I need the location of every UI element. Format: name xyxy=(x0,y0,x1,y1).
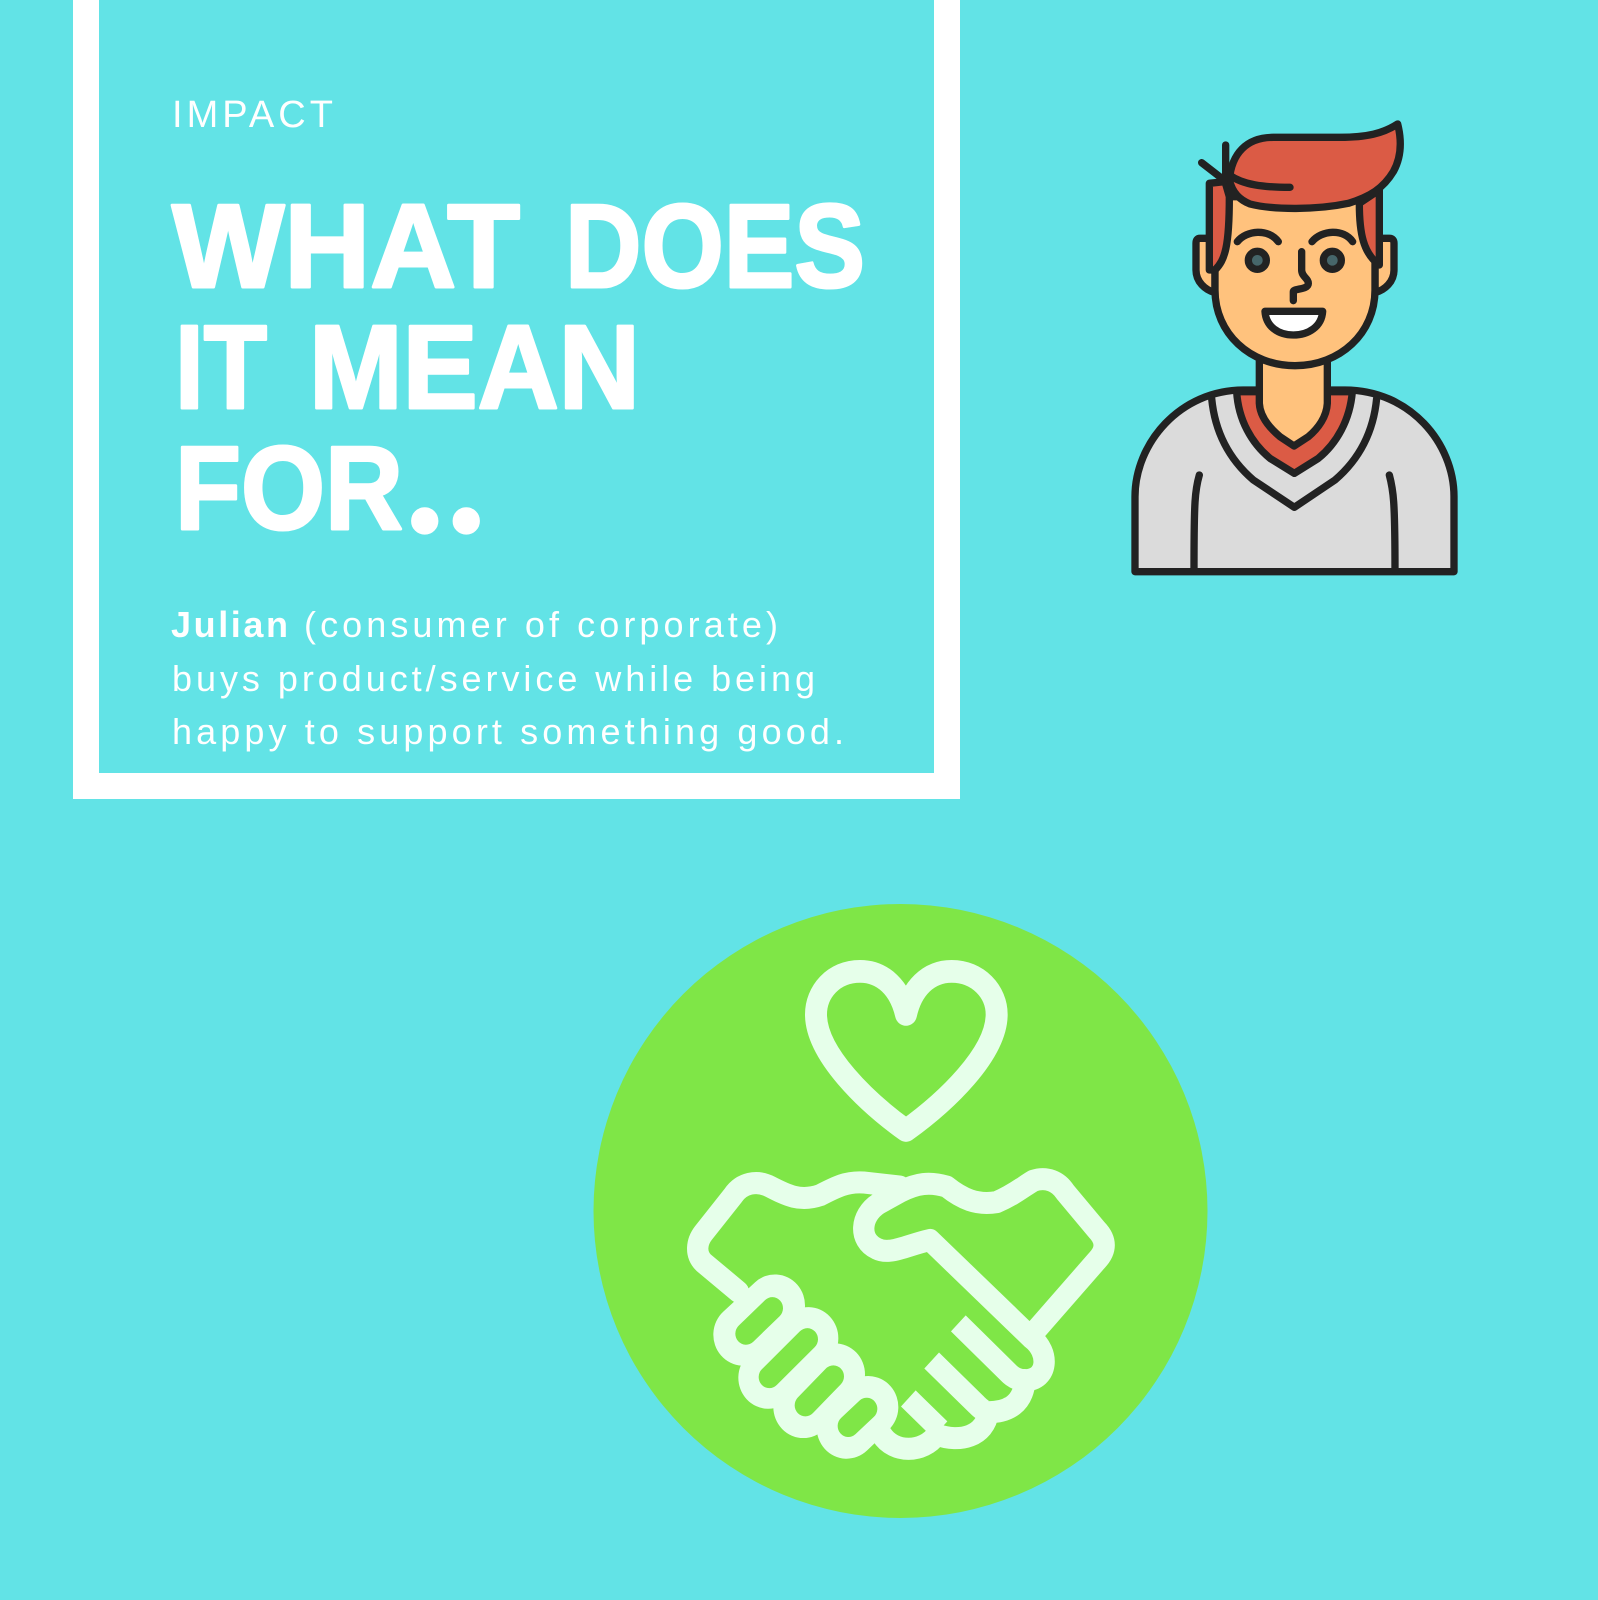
heading: what does it mean for: MEAN xyxy=(309,301,640,434)
eyebrow label: IMPACT: IMPACT xyxy=(172,94,333,136)
icon: smiling man with red hair xyxy=(1135,124,1454,572)
body text: Julian description: (consumer of corporate) xyxy=(304,604,778,645)
body text: Julian description xyxy=(171,604,844,752)
heading: what does it mean for: IT xyxy=(175,301,267,434)
man: smile xyxy=(1265,311,1323,335)
man: eyes xyxy=(1248,251,1341,269)
man: nose xyxy=(1293,252,1308,301)
man: face xyxy=(1215,197,1375,366)
man: ears xyxy=(1196,238,1394,293)
icon: green circle with heart and handshake xyxy=(594,904,1208,1518)
body text: Julian description: Julian xyxy=(171,604,288,645)
man: sweater body xyxy=(1135,360,1454,572)
left fingers xyxy=(743,1305,868,1428)
panel: white open-top frame xyxy=(73,0,960,799)
heading: what does it mean for: .. xyxy=(406,398,489,564)
body text: Julian description: buys product/service while being xyxy=(172,658,815,699)
green circle xyxy=(594,904,1208,1518)
heading: what does it mean for: FOR xyxy=(175,422,403,555)
heart outline xyxy=(816,971,997,1130)
heading: what does it mean for: DOES xyxy=(565,180,865,313)
man: eyebrows xyxy=(1237,232,1353,242)
heading: what does it mean for: WHAT xyxy=(172,180,520,313)
body text: Julian description: happy to support something good. xyxy=(172,711,844,752)
man: hair xyxy=(1202,124,1400,208)
heading: what does it mean for xyxy=(172,180,865,564)
man: sideburns xyxy=(1209,182,1379,270)
handshake xyxy=(698,1179,1104,1449)
